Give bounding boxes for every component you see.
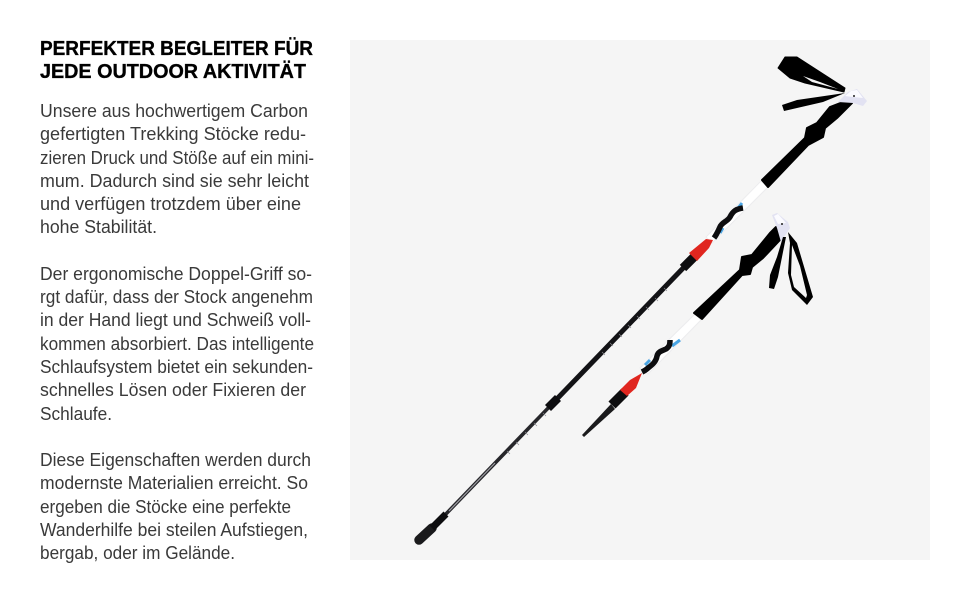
text block: carbon material: hohe Stabilität. [40,217,157,237]
red section [620,373,642,396]
foot and collars [419,528,432,540]
panel: product image background [350,40,930,560]
text block: carbon material: mum. Dadurch sind sie sehr leicht [40,171,309,191]
text block: ergonomic grip: rgt dafür, dass der Stock angenehm [40,287,313,307]
white and blue section [640,314,701,374]
grip [762,102,852,187]
wrist strap [778,57,845,92]
grip [694,227,780,319]
text block: carbon material: und verfügen trotzdem über eine [40,194,301,214]
black twist [642,340,670,372]
wrist strap [788,232,813,305]
text block: ergonomic grip: Schlaufe. [40,404,112,424]
white cap [838,89,867,106]
text block: modern materials: modernste Materialien erreicht. So [40,473,308,493]
title: JEDE OUTDOOR AKTIVITÄT [40,60,306,83]
text block: ergonomic grip [40,264,314,424]
text block: modern materials: Diese Eigenschaften werden durch [40,450,311,470]
title: PERFEKTER BEGLEITER FÜR [40,37,313,60]
text block: modern materials: bergab, oder im Gelände. [40,543,235,563]
black twist [714,208,743,238]
text block: modern materials: Wanderhilfe bei steilen Aufstiegen, [40,520,308,540]
lower shaft [444,403,553,516]
text block: modern materials [40,450,311,563]
short trekking pole [582,213,813,437]
text block: ergonomic grip: Schlaufsystem bietet ein sekunden- [40,357,313,377]
text block: ergonomic grip: in der Hand liegt und Schweiß voll- [40,310,311,330]
tip shaft [582,404,615,437]
text block: ergonomic grip: kommen absorbiert. Das intelligente [40,334,314,354]
white and blue section [706,181,768,243]
title [40,37,313,83]
text block: ergonomic grip: Der ergonomische Doppel-Griff so- [40,264,312,284]
text block: carbon material: zieren Druck und Stöße auf ein mini- [40,148,314,168]
white cap [772,213,790,242]
text block: ergonomic grip: schnelles Lösen oder Fixieren der [40,380,306,400]
collar [612,392,625,405]
text block: modern materials: ergeben die Stöcke eine perfekte [40,497,291,517]
text block: carbon material [40,101,314,237]
text block: carbon material: Unsere aus hochwertigem Carbon [40,101,308,121]
red section [689,239,713,261]
shaft scale ticks [507,288,667,454]
long trekking pole [419,57,867,540]
text block: carbon material: gefertigten Trekking Stöcke redu- [40,124,306,144]
